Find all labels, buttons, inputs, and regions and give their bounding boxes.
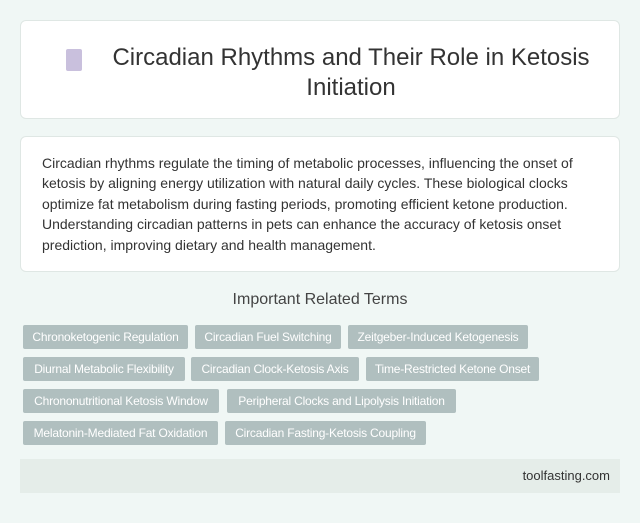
tags: Circadian Fasting-Ketosis Coupling — [235, 426, 416, 440]
heading: related terms: Important Related Terms — [233, 291, 407, 308]
header card — [20, 20, 620, 119]
icon: scroll — [66, 49, 82, 71]
tags: Zeitgeber-Induced Ketogenesis — [358, 330, 518, 344]
tags: Chrononutritional Ketosis Window — [34, 394, 208, 408]
tags: Time-Restricted Ketone Onset — [375, 362, 530, 376]
tags: Melatonin-Mediated Fat Oxidation — [34, 426, 207, 440]
tags: Circadian Fuel Switching — [204, 330, 332, 344]
tags: Chronoketogenic Regulation — [32, 330, 179, 344]
description text: Circadian rhythms regulate the timing of metabolic processes, influencing the onset of ketosis by aligning energy utilization with natural daily cycles. These biological clocks optimize fat metabolism during fasting periods, promoting efficient ketone production. Understanding circadian patterns in pets can enhance the accuracy of ketosis onset prediction, improving dietary and health management. — [42, 155, 573, 253]
tags: Diurnal Metabolic Flexibility — [34, 362, 174, 376]
title: Circadian Rhythms and Their Role in Ketosis Initiation — [112, 44, 590, 101]
footer — [20, 459, 620, 493]
description card — [20, 136, 620, 272]
tags: Peripheral Clocks and Lipolysis Initiation — [238, 394, 445, 408]
footer source text: toolfasting.com — [523, 468, 610, 483]
tags: Circadian Clock-Ketosis Axis — [201, 362, 349, 376]
